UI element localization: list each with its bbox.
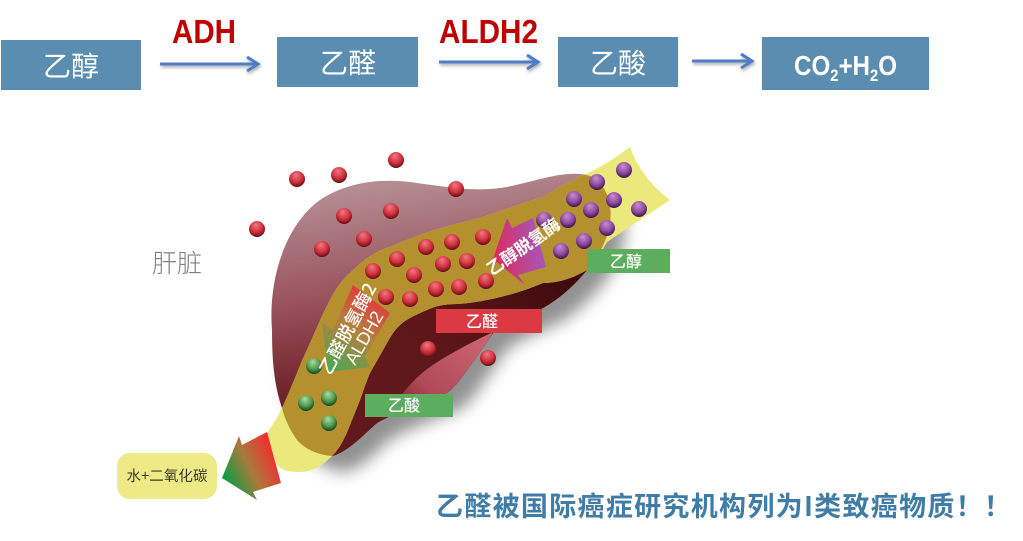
label: acetic acid: 乙酸 [388,392,420,416]
box: CO2 + H2O: +H [838,50,870,81]
label: ALDH2: ALDH2 [439,13,538,50]
box: ethanol [1,40,141,90]
liver body [271,174,611,456]
enzyme arrow: acetaldehyde dehydrogenase ALDH2: 乙醛脱氢酶2 [312,278,382,379]
liver lower lobe [377,332,493,424]
arrow: ethanol to acetaldehyde [160,57,258,71]
label: ADH: ADH [172,13,236,50]
box: CO2 + H2O: O [878,50,897,81]
liver illustration [267,147,670,472]
box: CO2 + H2O: 2 [870,66,878,85]
label: ethanol [587,248,670,273]
digestive band inside the liver, golden [282,174,611,456]
box: ethanol: 乙醇 [43,45,99,85]
label: acetaldehyde: 乙醛 [466,308,498,332]
box: acetic acid [558,37,678,87]
green acetic acid molecules [298,358,337,431]
liver drop shadow [285,190,625,472]
purple ethanol molecules [536,162,647,259]
enzyme arrow: alcohol dehydrogenase: 乙醇脱氢酶 [481,211,564,280]
box: CO2 + H2O [762,37,929,90]
callout: water and carbon dioxide: 水+二氧化碳 [126,465,208,486]
arrow: acetic acid to CO2 and water [692,54,752,68]
label: liver: 肝脏 [152,244,202,280]
box: acetic acid: 乙酸 [590,42,646,82]
conclusion text: 乙醛被国际癌症研究机构列为I类致癌物质！！ [436,485,1011,524]
enzyme arrow: acetaldehyde dehydrogenase ALDH2: ALDH2 [341,308,387,368]
box: acetaldehyde: 乙醛 [320,42,376,82]
box: CO2 + H2O: CO [794,50,836,81]
callout: water and carbon dioxide [117,453,217,499]
digestive band, pale yellow [267,147,670,472]
liver dark lower region [332,270,587,456]
red acetaldehyde molecules [249,152,496,366]
box: acetaldehyde [277,37,418,87]
label: acetaldehyde [436,308,542,333]
arrow: output from liver [222,432,281,500]
arrow: acetaldehyde to acetic acid [439,55,538,69]
label: acetic acid [365,392,453,417]
label: ethanol: 乙醇 [610,248,642,272]
box: CO2 + H2O: 2 [830,66,838,85]
